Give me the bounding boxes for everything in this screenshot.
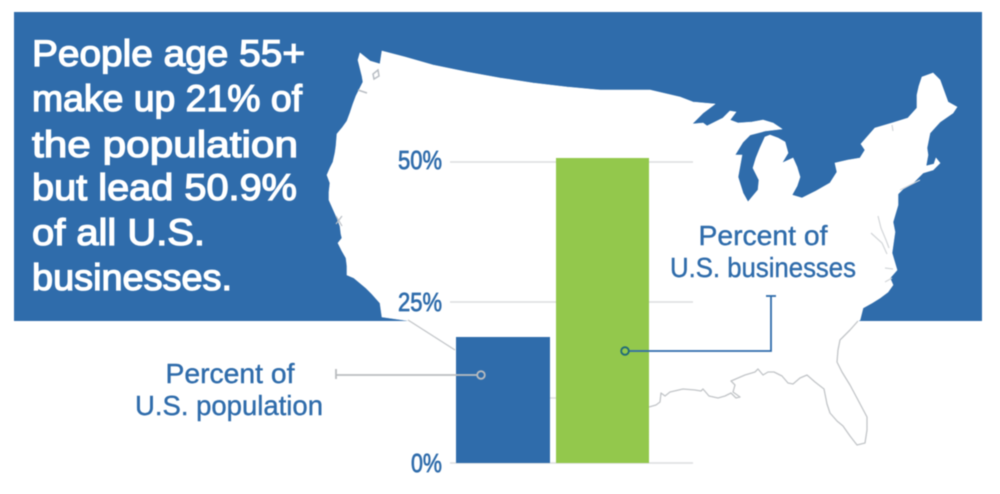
callout label <box>135 358 323 421</box>
callout label: Percent of <box>698 220 828 251</box>
map: southwest border outline <box>408 320 455 350</box>
map: San Francisco Bay detail <box>336 216 342 226</box>
blue banner panel <box>14 12 982 321</box>
headline: People age 55+ <box>32 33 305 74</box>
bar: percent of U.S. businesses <box>556 158 649 463</box>
callout label <box>670 220 856 283</box>
headline: of all U.S. <box>32 212 205 253</box>
callout label: U.S. businesses <box>670 252 856 283</box>
map: contiguous United States <box>327 51 957 470</box>
callout label: Percent of <box>166 358 295 389</box>
callout connector <box>621 296 776 355</box>
callout: percent of U.S. population <box>135 358 485 421</box>
callout label: U.S. population <box>135 390 323 421</box>
chart gridlines <box>450 162 693 463</box>
y-axis labels: 50% <box>398 145 442 175</box>
map: white land silhouette <box>327 51 957 470</box>
headline: but lead 50.9% <box>32 167 297 208</box>
headline: businesses. <box>32 257 232 298</box>
callout: percent of U.S. businesses <box>621 220 856 355</box>
y-axis labels <box>398 145 442 478</box>
map: Puget Sound detail <box>358 70 379 93</box>
y-axis labels: 0% <box>411 448 442 478</box>
map: New England and Chesapeake details <box>871 125 920 282</box>
map: Gulf and Florida coastline outline <box>649 321 867 445</box>
headline: make up 21% of <box>32 78 303 119</box>
bar: percent of U.S. population <box>456 337 550 463</box>
callout connector <box>336 369 485 379</box>
headline: the population <box>32 124 298 165</box>
y-axis labels: 25% <box>398 287 442 317</box>
bar chart <box>398 145 693 478</box>
headline <box>32 33 305 298</box>
